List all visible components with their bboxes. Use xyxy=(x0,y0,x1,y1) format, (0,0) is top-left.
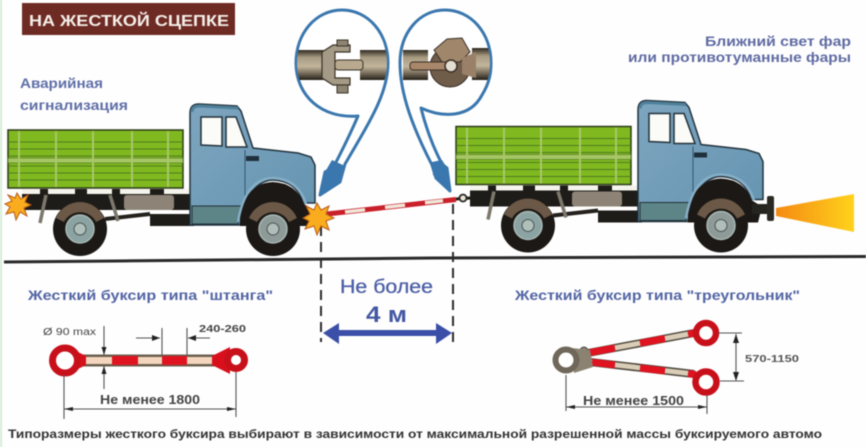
title badge: НА ЖЕСТКОЙ СЦЕПКЕ xyxy=(29,11,229,30)
dimension: triangle width: 570-1150 xyxy=(745,353,799,365)
label: hazard lights: сигнализация xyxy=(20,97,128,113)
diagram: bar tow xyxy=(52,326,244,419)
ground line xyxy=(4,256,866,262)
footer note: Типоразмеры жесткого буксира выбирают в зависимости от максимальной разрешенной массы буксируемого автомо xyxy=(8,429,822,441)
towed truck xyxy=(456,100,763,252)
dimension: diameter: Ø 90 max xyxy=(43,327,96,338)
front bumper of towed truck xyxy=(752,196,774,221)
callout: right coupling xyxy=(400,10,491,191)
limit: not more than 4 m: Не более xyxy=(340,277,433,298)
heading: bar tow: Жесткий буксир типа "штанга" xyxy=(27,287,273,303)
front wheel xyxy=(246,202,300,256)
label: hazard lights xyxy=(20,75,128,113)
chassis xyxy=(22,189,194,226)
cargo bed xyxy=(8,130,183,188)
bubble outline xyxy=(296,10,388,195)
limit: not more than 4 m: 4 м xyxy=(366,302,407,327)
label: headlights xyxy=(628,33,851,65)
coupling detail xyxy=(296,40,390,93)
coupling detail xyxy=(403,38,490,87)
dimension: segment length: 240-260 xyxy=(199,323,246,335)
heading: triangle tow: Жесткий буксир типа "треугольник" xyxy=(514,287,800,303)
label: headlights: или противотуманные фары xyxy=(628,49,851,65)
tow bar xyxy=(327,194,470,214)
arrow head xyxy=(320,160,345,195)
double arrow xyxy=(323,323,452,344)
diagram: triangle tow xyxy=(556,323,744,414)
label: hazard lights: Аварийная xyxy=(20,75,103,91)
hazard flash: rear xyxy=(5,193,31,220)
arrow head xyxy=(432,160,450,191)
callout: left coupling xyxy=(296,10,390,195)
light beam xyxy=(776,194,854,232)
towing truck xyxy=(8,104,315,256)
dashed limits xyxy=(321,204,453,342)
label: headlights: Ближний свет фар xyxy=(705,33,851,49)
dimension: triangle length: Не менее 1500 xyxy=(583,394,684,408)
cab xyxy=(190,104,315,226)
bubble outline xyxy=(400,10,491,191)
title badge xyxy=(22,3,235,35)
dimension: bar length: Не менее 1800 xyxy=(100,393,200,407)
limit: not more than 4 m xyxy=(323,277,452,344)
hazard flash: front xyxy=(303,203,334,235)
rear wheel xyxy=(53,202,107,256)
